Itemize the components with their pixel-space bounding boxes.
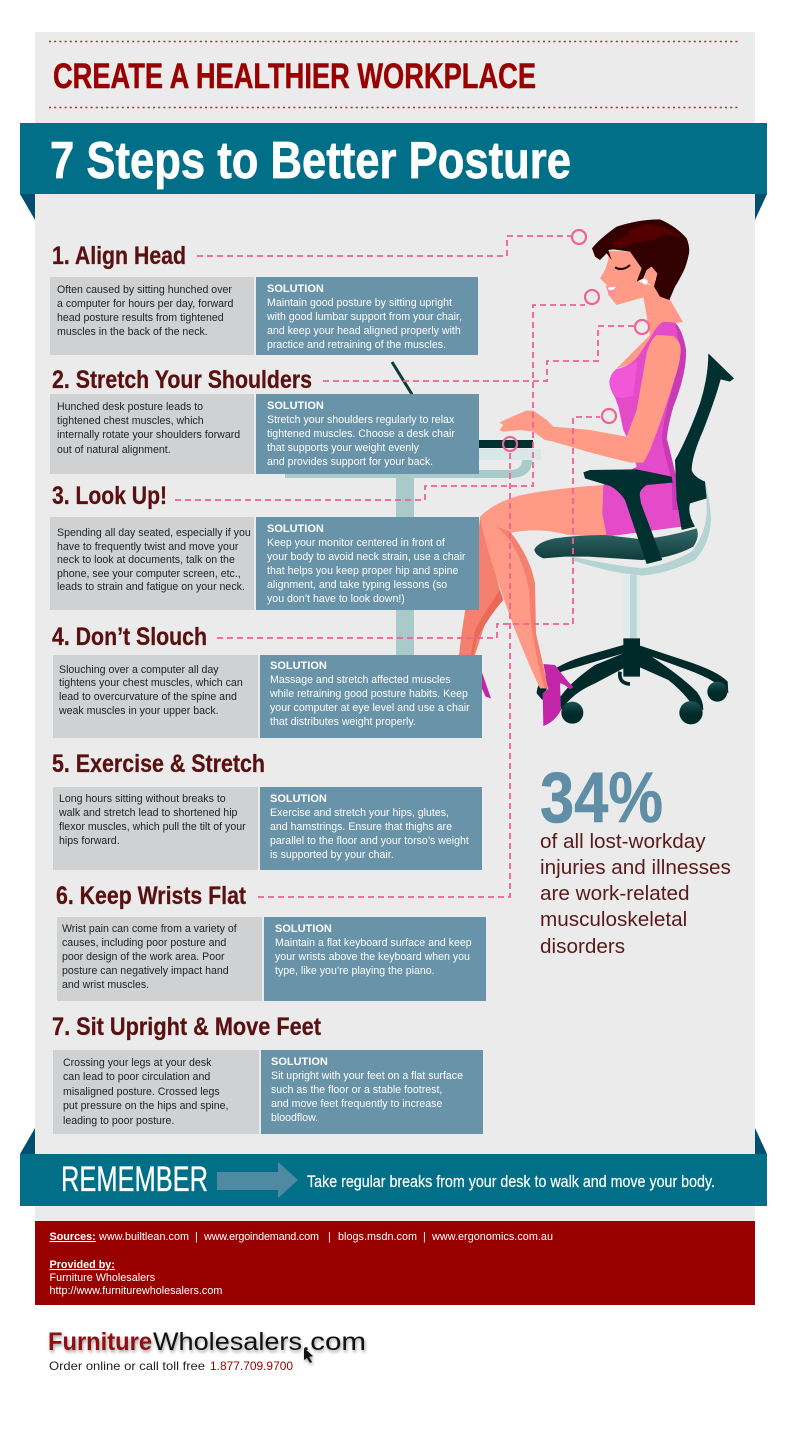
lips — [605, 285, 617, 296]
step 1 solution box: practice and retraining of the muscles. — [267, 339, 446, 351]
step 7 problem box: misaligned posture. Crossed legs — [63, 1086, 220, 1098]
step 7 solution box — [261, 1050, 483, 1134]
arrow — [217, 1162, 298, 1198]
step 7 problem box: leading to poor posture. — [63, 1115, 174, 1127]
banner: 7 steps: 7 Steps to Better Posture — [50, 132, 571, 190]
step 3 problem box — [50, 517, 254, 610]
step 4 problem box: lead to overcurvature of the spine and — [59, 691, 237, 703]
statistic: 34 percent: 34% — [540, 759, 663, 838]
statistic: 34 percent: musculoskeletal — [540, 908, 687, 931]
step 1 heading: 1. Align Head — [52, 242, 186, 270]
head — [592, 219, 689, 305]
logo: furniture wholesalers — [48, 1328, 366, 1363]
order line: Order online or call toll free — [49, 1359, 205, 1373]
order line: 1.877.709.9700 — [210, 1359, 293, 1373]
step 7 heading: 7. Sit Upright & Move Feet — [52, 1013, 322, 1041]
statistic: 34 percent: of all lost-workday — [540, 830, 706, 853]
step 3 heading: 3. Look Up! — [52, 482, 167, 510]
icon: cursor — [304, 1348, 313, 1363]
footer: sources: | — [328, 1231, 331, 1243]
step 2 problem box: Hunched desk posture leads to — [57, 401, 203, 413]
illustration: desk — [285, 362, 541, 656]
step 7 solution box: Sit upright with your feet on a flat surface — [271, 1070, 463, 1082]
step 2 heading: 2. Stretch Your Shoulders — [52, 366, 312, 394]
step 6 solution box: your wrists above the keyboard when you — [275, 951, 470, 963]
step 1 problem box: head posture results from tightened — [57, 312, 224, 324]
step 7 problem box: put pressure on the hips and spine, — [63, 1100, 228, 1112]
step 7 solution box: and move feet frequently to increase — [271, 1098, 442, 1110]
front leg — [480, 485, 607, 688]
panel: page background — [35, 32, 755, 1222]
hair highlight — [612, 223, 682, 248]
step 4 solution box: your computer at eye level and use a chair — [270, 702, 470, 714]
illustration: woman on office chair — [459, 219, 734, 726]
footer: sources: | — [195, 1231, 198, 1243]
step 1 problem box — [50, 277, 254, 355]
step 4 problem box: Slouching over a computer all day — [59, 664, 219, 676]
step 6 problem box: posture can negatively impact hand — [62, 965, 229, 977]
step 1 solution box: and keep your head aligned properly with — [267, 325, 461, 337]
logo: furniture wholesalers: Wholesalers — [153, 1328, 302, 1356]
footer: sources — [35, 1221, 755, 1305]
neck and chest — [616, 280, 683, 369]
step 6 problem box: Wrist pain can come from a variety of — [62, 923, 237, 935]
banner: 7 steps — [20, 123, 767, 220]
step 4 solution box: while retraining good posture habits. Keep — [269, 688, 468, 700]
step 4 problem box: tightens your chest muscles, which can — [59, 677, 243, 689]
step 3 solution box: Keep your monitor centered in front of — [267, 537, 445, 549]
step 5 problem box — [53, 787, 258, 870]
dress — [602, 322, 686, 537]
statistic: 34 percent: disorders — [540, 935, 625, 958]
step 3 problem box: phone, see your computer screen, etc., — [57, 568, 241, 580]
step 2 solution box: Stretch your shoulders regularly to relax — [267, 414, 455, 426]
banner: remember: Take regular breaks from your desk to walk and move your body. — [307, 1172, 715, 1191]
step 6 heading: 6. Keep Wrists Flat — [56, 882, 247, 910]
step 2 problem box: internally rotate your shoulders forward — [57, 429, 240, 441]
step 5 solution box: and hamstrings. Ensure that thighs are — [270, 821, 452, 833]
step 1 problem box: Often caused by sitting hunched over — [57, 284, 232, 296]
step 4 solution box: Massage and stretch affected muscles — [270, 674, 451, 686]
footer: sources: www.builtlean.com — [98, 1231, 189, 1243]
step 6 solution box — [264, 917, 486, 1001]
step 3 solution box: that helps you keep proper hip and spine — [267, 565, 459, 577]
step 5 heading: 5. Exercise & Stretch — [52, 750, 265, 778]
step 1 solution box: SOLUTION — [267, 283, 324, 295]
step 3 problem box: leads to strain and fatigue on your neck. — [57, 581, 245, 593]
statistic: 34 percent: are work-related — [540, 882, 689, 905]
step 2 solution box: tightened muscles. Choose a desk chair — [267, 428, 455, 440]
step 3 solution box: alignment, and take typing lessons (so — [267, 579, 447, 591]
step 6 problem box: causes, including poor posture and — [62, 937, 226, 949]
footer: sources: http://www.furniturewholesalers.com — [50, 1285, 222, 1297]
callout lines connecting steps to the figure — [175, 230, 649, 897]
step 1 problem box: muscles in the back of the neck. — [57, 326, 208, 338]
step 7 problem box: can lead to poor circulation and — [63, 1071, 210, 1083]
step 7 solution box: such as the floor or a stable footrest, — [271, 1084, 442, 1096]
step 7 problem box — [53, 1050, 259, 1134]
footer: sources: | — [423, 1231, 426, 1243]
chair column — [623, 575, 640, 639]
step 3 solution box: you don’t have to look down!) — [267, 593, 405, 605]
step 4 heading: 4. Don’t Slouch — [52, 623, 207, 651]
step 7 solution box: SOLUTION — [271, 1056, 328, 1068]
step 6 problem box: poor design of the work area. Poor — [62, 951, 225, 963]
step 3 problem box: have to frequently twist and move your — [57, 541, 239, 553]
step 1 solution box: with good lumbar support from your chair, — [266, 311, 462, 323]
ear — [643, 267, 657, 285]
step 3 problem box: neck to look at documents, talk on the — [57, 554, 235, 566]
step 6 problem box — [57, 917, 262, 1001]
step 1 solution box — [256, 277, 478, 355]
step 4 problem box — [53, 655, 258, 738]
shoe — [543, 664, 573, 726]
arm — [499, 335, 681, 463]
step 2 solution box: SOLUTION — [267, 400, 324, 412]
step 2 solution box: that supports your weight evenly — [267, 442, 420, 454]
footer: sources: Sources: — [50, 1231, 96, 1243]
chair hub — [620, 672, 630, 684]
step 1 solution box: Maintain good posture by sitting upright — [267, 297, 452, 309]
step 1 problem box: a computer for hours per day, forward — [57, 298, 234, 310]
chair lower parts and legs — [459, 480, 728, 726]
step 2 problem box: tightened chest muscles, which — [57, 415, 204, 427]
logo: furniture wholesalers: .com — [302, 1328, 366, 1356]
step 6 solution box: SOLUTION — [275, 923, 332, 935]
hair — [592, 219, 689, 300]
title: create a healthier workplace: CREATE A HEALTHIER WORKPLACE — [53, 57, 536, 96]
step 3 solution box — [256, 517, 479, 610]
step 3 solution box: SOLUTION — [267, 523, 324, 535]
logo: furniture wholesalers: Furniture — [48, 1328, 152, 1356]
step 5 problem box: hips forward. — [59, 835, 120, 847]
banner: remember: REMEMBER — [61, 1160, 208, 1199]
statistic: 34 percent: injuries and illnesses — [540, 856, 731, 879]
step 4 problem box: weak muscles in your upper back. — [58, 705, 219, 717]
footer: sources: Provided by: — [50, 1259, 115, 1271]
footer: sources: www.ergoindemand.com — [203, 1231, 319, 1243]
step 4 solution box: SOLUTION — [270, 660, 327, 672]
step 5 solution box: SOLUTION — [270, 793, 327, 805]
step 3 solution box: your body to avoid neck strain, use a chair — [267, 551, 466, 563]
step 2 problem box — [50, 394, 254, 474]
step 4 solution box: that distributes weight properly. — [270, 716, 416, 728]
step 5 solution box — [260, 787, 482, 870]
chair back — [675, 353, 734, 530]
step 2 solution box: and provides support for your back. — [267, 456, 433, 468]
step 2 problem box: out of natural alignment. — [57, 444, 171, 456]
step 5 problem box: Long hours sitting without breaks to — [59, 793, 226, 805]
chair base — [537, 638, 728, 710]
back leg — [459, 517, 503, 698]
step 6 solution box: type, like you’re playing the piano. — [275, 965, 435, 977]
footer: sources: blogs.msdn.com — [338, 1231, 417, 1243]
face — [600, 251, 669, 305]
step 5 problem box: flexor muscles, which pull the tilt of your — [59, 821, 246, 833]
earring — [642, 279, 648, 284]
banner: remember — [20, 1128, 767, 1206]
chair armrest — [583, 469, 673, 564]
eye — [615, 265, 630, 269]
step 5 solution box: parallel to the floor and your torso’s weight — [270, 835, 469, 847]
statistic: 34 percent — [540, 759, 731, 958]
chair wheels — [561, 682, 727, 724]
step 6 solution box: Maintain a flat keyboard surface and keep — [275, 937, 472, 949]
chair frame — [572, 480, 711, 576]
step 6 problem box: and wrist muscles. — [62, 979, 149, 991]
step 5 problem box: walk and stretch lead to shortened hip — [58, 807, 238, 819]
step 4 solution box — [260, 655, 482, 738]
step 2 solution box — [256, 394, 479, 474]
step 7 solution box: bloodflow. — [271, 1112, 318, 1124]
chair seat and arm — [534, 528, 698, 560]
footer: sources: Furniture Wholesalers — [50, 1272, 156, 1284]
step 3 problem box: Spending all day seated, especially if you — [57, 527, 251, 539]
footer: sources: www.ergonomics.com.au — [431, 1231, 553, 1243]
step 7 problem box: Crossing your legs at your desk — [63, 1057, 212, 1069]
step 5 solution box: is supported by your chair. — [270, 849, 394, 861]
order line — [49, 1359, 293, 1373]
step 5 solution box: Exercise and stretch your hips, glutes, — [270, 807, 449, 819]
